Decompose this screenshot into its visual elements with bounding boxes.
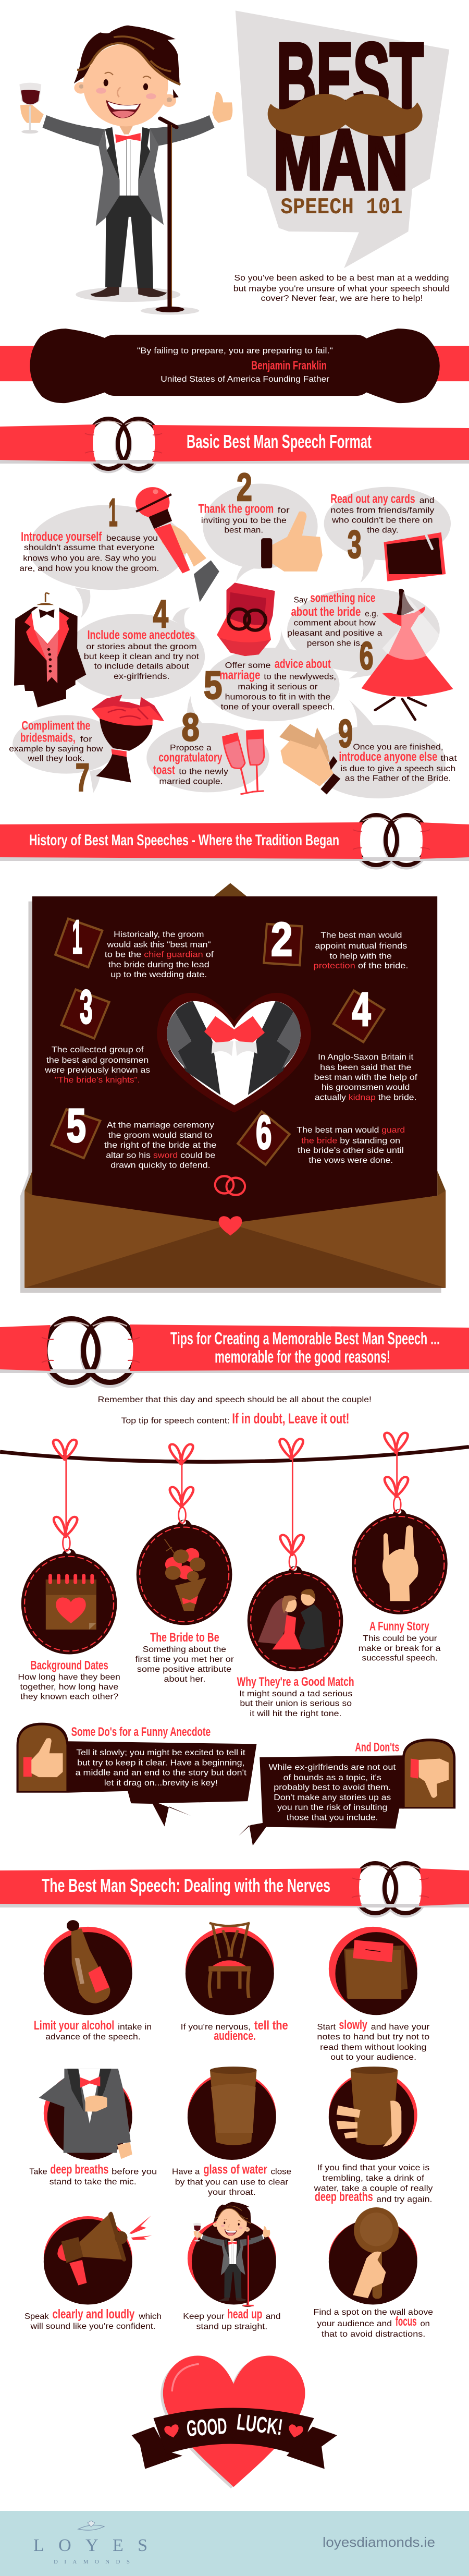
quote: "By failing to prepare, you are preparing to fail.": [137, 346, 333, 355]
icon: banner hearts: [164, 2424, 304, 2439]
label: deep breaths: Take: [29, 2167, 47, 2177]
label: a funny story: successful speech.: [362, 1654, 438, 1662]
label: start slowly: out to your audience.: [330, 2053, 416, 2062]
text: advice about marriage: making it serious or: [238, 683, 318, 691]
numbers 1-6: 3: [80, 981, 93, 1034]
text: don'ts: [268, 1763, 396, 1822]
text: include anecdotes: [84, 627, 199, 681]
icon: thumbs up: [23, 1738, 63, 1777]
text: good luck: LUCK!: [236, 2410, 284, 2440]
panel: nerves row one: [34, 1920, 430, 2062]
author role: United States of America Founding Father: [161, 375, 330, 384]
numbers 1-9: 8: [181, 706, 200, 749]
numbers 1-9: 9: [338, 712, 353, 756]
heading: don'ts: And Don'ts: [355, 1740, 399, 1754]
text 1: the bride during the lead: [108, 961, 209, 969]
label: background dates: they known each other?: [20, 1693, 118, 1701]
text 2: The best man would: [320, 931, 402, 940]
banner: quote bow tie: [0, 329, 469, 403]
icon: two rings: [215, 1176, 245, 1195]
text 6: the bride by standing on: [301, 1137, 400, 1145]
icon: megaphone: [57, 2212, 152, 2286]
text: include anecdotes: or stories about the groom: [86, 642, 197, 651]
panel: history envelope: [20, 883, 446, 1293]
label: trembling voice: and try again.: [376, 2195, 432, 2204]
text: don'ts: While ex-girlfriends are not out: [268, 1763, 396, 1772]
text: read out cards: notes from friends/family: [330, 506, 435, 515]
tip: limit alcohol: [34, 1920, 152, 2042]
icon: moustache: [268, 94, 423, 136]
numbers 1-9: 5: [204, 663, 222, 708]
text: compliment the bridesmaids: Compliment the: [21, 718, 90, 733]
text: something nice about the bride: person she is.: [307, 639, 363, 648]
text 3: "The bride's knights".: [55, 1076, 140, 1085]
numbers 1-9: 4: [153, 592, 168, 636]
label: deep breaths: stand to take the mic.: [50, 2178, 137, 2186]
label: speak clearly: Speak: [24, 2312, 49, 2321]
text: advice about marriage: advice about: [275, 657, 331, 671]
label: speak clearly: [24, 2307, 162, 2331]
envelope back: [24, 883, 446, 1197]
text: propose a toast: toast: [153, 762, 175, 777]
label: the bride to be: Something about the: [143, 1645, 226, 1654]
heading: history ribbon: [0, 815, 469, 868]
text: good luck: GOOD: [186, 2413, 228, 2441]
label: start slowly: slowly: [339, 2017, 367, 2032]
icon: clapping hands: [279, 724, 340, 794]
text: thank the groom: best man.: [225, 526, 263, 534]
text 5: At the marriage ceremony: [107, 1121, 215, 1129]
icon: hand holding microphone: [135, 487, 219, 602]
icon: bouquet: [165, 1539, 206, 1611]
text 5: [104, 1121, 217, 1170]
label: a funny story: [359, 1619, 441, 1662]
heading: basic format ribbon: Basic Best Man Speech Format: [187, 431, 372, 452]
text 2: [314, 931, 409, 970]
heading: nerves ribbon: The Best Man Speech: Dealing with the Nerves: [42, 1875, 330, 1896]
label: head up: head up: [227, 2307, 262, 2322]
numbers 1-6: 2: [271, 914, 292, 966]
text: do's: [76, 1748, 246, 1788]
text: compliment the bridesmaids: bridesmaids,: [20, 730, 76, 745]
text: something nice about the bride: comment about how: [294, 618, 376, 627]
text: introduce yourself: Introduce yourself: [21, 529, 102, 544]
label: speak clearly: clearly and loudly: [52, 2307, 135, 2322]
icon: tuxedo on hanger: [14, 593, 86, 708]
label: glass of water: your throat.: [208, 2188, 256, 2197]
numbers 1-6: 5: [67, 1100, 86, 1152]
label: deep breaths: deep breaths: [50, 2162, 108, 2177]
text 3: the best and groomsmen: [46, 1056, 149, 1065]
heading: basic format ribbon: [0, 419, 469, 471]
text 2: protection of the bride.: [314, 962, 409, 970]
text: introduce anyone else: is due to give a speech such: [340, 764, 455, 773]
text: something nice about the bride: something nice: [310, 590, 375, 605]
icon: mini groom: [193, 2202, 270, 2307]
text 5: the right of the bride at the: [104, 1141, 217, 1150]
text: include anecdotes: ex-girlfriends.: [114, 672, 169, 681]
label: find a spot: that to avoid distractions.: [322, 2330, 425, 2339]
callout: don'ts: [239, 1739, 455, 1845]
letter: [32, 896, 437, 1225]
text: thank the groom: Thank the groom: [199, 501, 274, 516]
history tiles with numbers: [52, 919, 385, 1165]
icon: notebook: [384, 532, 446, 581]
tip: deep breaths: [29, 2069, 157, 2186]
envelope shadow: [20, 902, 441, 1293]
text 2: to help with the: [330, 952, 392, 961]
illustration: tuxedo heart: [157, 993, 311, 1113]
text: something nice about the bride: e.g.: [365, 610, 378, 618]
speech bubbles: [13, 484, 451, 798]
numbers 1-9: [76, 466, 374, 800]
text: something nice about the bride: pleasant and positive a: [287, 629, 383, 638]
intro text: [233, 274, 450, 303]
label: why they're a good match: It might sound a tad serious: [239, 1690, 352, 1698]
text: compliment the bridesmaids: example by saying how: [9, 745, 103, 754]
label: start slowly: notes to hand but try not to: [317, 2033, 429, 2042]
icon: chair: [208, 1923, 251, 1998]
heading: tips ribbon: [0, 1319, 469, 1386]
label: tell the audience: [181, 2018, 288, 2043]
label: glass of water: close: [270, 2167, 291, 2177]
label: why they're a good match: it will hit the right tone.: [250, 1709, 342, 1718]
text: compliment the bridesmaids: for: [80, 735, 92, 744]
text: introduce anyone else: that: [441, 754, 457, 763]
icon: bottle: [67, 1920, 110, 2003]
label: why they're a good match: Why They're a Good Match: [237, 1674, 354, 1689]
intro text: So you've been asked to be a best man at a wedding: [234, 274, 449, 283]
text: advice about marriage: humorous to fit in with the: [225, 692, 330, 701]
text 1: Historically, the groom: [114, 930, 204, 939]
text: propose a toast: congratulatory: [158, 750, 223, 764]
label: trembling voice: [314, 2164, 433, 2204]
text: propose a toast: [153, 744, 229, 786]
icon: rock hand sign: [382, 1525, 418, 1601]
text: don'ts: probably best to avoid them.: [274, 1783, 391, 1792]
label: trembling voice: trembling, take a drink of: [323, 2174, 425, 2183]
numbers 1-6: [67, 911, 371, 1159]
label: tell the audience: tell the: [254, 2018, 288, 2032]
text 6: The best man would guard: [297, 1126, 405, 1135]
text: good luck: [186, 2410, 284, 2441]
icon: hand holding paddle: [353, 2207, 399, 2299]
heading: do's: Some Do's for a Funny Anecdote: [71, 1724, 211, 1739]
text: introduce anyone else: as the Father of the Bride.: [345, 774, 451, 783]
tip: glass of water: [172, 2067, 291, 2197]
text: propose a toast: to the newly: [179, 768, 229, 776]
text 3: The collected group of: [52, 1046, 144, 1054]
text: introduce yourself: shouldn't assume that everyone: [24, 543, 155, 552]
text: do's: but try to keep it clear. Have a beginning,: [77, 1759, 245, 1767]
label: find a spot: on: [420, 2319, 430, 2328]
text 1: [105, 930, 214, 979]
numbers 1-6: 4: [352, 983, 371, 1036]
tip: tell the audience: [181, 1923, 288, 2043]
text: advice about marriage: [219, 657, 336, 711]
label: trembling voice: If you find that your voice is: [317, 2164, 429, 2172]
label: the bride to be: first time you met her or: [135, 1655, 234, 1664]
numbers 1-9: 3: [348, 523, 362, 566]
text: introduce anyone else: [339, 743, 457, 783]
numbers 1-6: 1: [72, 911, 82, 964]
panel: nerves rows two and three: [24, 2067, 433, 2488]
label: glass of water: Have a: [172, 2167, 200, 2177]
icon: glass: [210, 2067, 256, 2145]
text 6: the vows were done.: [308, 1156, 393, 1165]
label: a funny story: make or break for a: [359, 1644, 441, 1653]
numbers 1-6: 6: [256, 1107, 271, 1159]
text: do's: let it drag on...brevity is key!: [104, 1779, 218, 1788]
text 1: to be the chief guardian of: [105, 951, 214, 959]
text: don'ts: Don't make any stories up as: [274, 1793, 391, 1802]
text 3: [44, 1046, 150, 1085]
text: include anecdotes: but keep it clean and try not: [84, 652, 199, 661]
text: don'ts: of bounds as a topic, it's: [283, 1773, 381, 1782]
text: introduce anyone else: Once you are finished,: [353, 743, 443, 752]
icon: champagne flutes: [223, 730, 264, 794]
text: advice about marriage: Offer some: [225, 661, 270, 670]
label: limit alcohol: [34, 2018, 152, 2042]
text: read out cards: the day.: [367, 526, 399, 534]
text 4: best man with the help of: [314, 1073, 418, 1082]
label: find a spot: [314, 2308, 433, 2339]
website: loyesdiamonds.ie: [323, 2534, 435, 2550]
text 6: the bride's other side until: [298, 1146, 404, 1155]
label: glass of water: glass of water: [203, 2162, 267, 2177]
tip: find a spot: [314, 2207, 433, 2339]
text: advice about marriage: tone of your overall speech.: [221, 703, 335, 711]
text: read out cards: who couldn't be there on: [331, 516, 433, 525]
intro text: cover? Never fear, we are here to help!: [261, 294, 423, 303]
text: introduce yourself: because you: [106, 534, 158, 543]
text: something nice about the bride: [287, 590, 383, 648]
text: do's: Tell it slowly; you might be excited to tell it: [76, 1748, 245, 1757]
numbers 1-9: 1: [108, 491, 118, 535]
quote author: Benjamin Franklin: [251, 359, 327, 372]
label: limit alcohol: intake in: [118, 2023, 152, 2032]
icon: hand holding glass: [337, 2067, 401, 2147]
envelope front: [24, 1190, 446, 1288]
icon: wedding dress: [361, 589, 453, 720]
heading: nerves ribbon: [0, 1863, 469, 1916]
label: start slowly: read them without looking: [320, 2043, 427, 2052]
label: head up: Keep your: [183, 2312, 225, 2321]
text: something nice about the bride: Say: [294, 596, 308, 604]
label: limit alcohol: advance of the speech.: [45, 2033, 141, 2042]
label: glass of water: by that you can use to clear: [175, 2178, 288, 2187]
text: introduce yourself: are, and how you know the groom.: [19, 564, 159, 573]
text: thank the groom: inviting you to be the: [201, 516, 287, 525]
text: top tip: [121, 1411, 349, 1427]
good luck heart: [132, 2356, 337, 2488]
logo: loyes diamonds: DIAMONDS: [54, 2559, 130, 2565]
panel: hero: [0, 10, 469, 403]
label: find a spot: Find a spot on the wall above: [314, 2308, 433, 2317]
panel: tips: [0, 1395, 469, 1718]
logo: loyes diamonds: LOYES: [33, 2536, 147, 2555]
label: background dates: [18, 1658, 120, 1701]
panel: basic speech format: [9, 466, 457, 800]
icon: bouquet: [92, 695, 164, 783]
numbers 1-9: 6: [360, 634, 374, 678]
text: don'ts: those that you include.: [287, 1813, 378, 1822]
label: find a spot: focus: [396, 2315, 417, 2329]
label: why they're a good match: [237, 1674, 354, 1718]
panel: do's and don'ts: [17, 1723, 455, 1845]
text 1: up to the wedding date.: [110, 970, 207, 979]
text: do's: a middle and an end to the story but don't: [76, 1768, 246, 1777]
label: a funny story: This could be your: [363, 1634, 437, 1643]
label: the bride to be: about her.: [164, 1675, 205, 1684]
icon: calendar: [46, 1574, 96, 1630]
text: compliment the bridesmaids: well they look.: [27, 755, 84, 763]
illustration: groom with microphone: [19, 26, 232, 315]
icon: mini stand: [243, 2235, 254, 2305]
label: why they're a good match: but their union is serious so: [240, 1699, 352, 1708]
icon: envelope heart: [219, 1216, 242, 1236]
text 1: would ask this "best man": [106, 941, 211, 950]
text: top tip: If in doubt, Leave it out!: [232, 1411, 349, 1427]
text 5: drawn quickly to defend.: [110, 1161, 211, 1170]
text 2: appoint mutual friends: [315, 942, 407, 951]
text: thank the groom: [199, 501, 290, 534]
icon: jacket with hand on chest: [39, 2069, 132, 2159]
icon: thumbs up: [261, 512, 323, 572]
label: deep breaths: [29, 2162, 157, 2186]
text 4: has been said that the: [320, 1063, 411, 1072]
text: include anecdotes: to include details about: [94, 662, 189, 671]
label: the bride to be: some positive attribute: [137, 1665, 231, 1674]
text 5: altar so his sword could be: [106, 1151, 215, 1160]
ornament: good match: [237, 1439, 354, 1718]
label: background dates: together, how long have: [20, 1683, 118, 1692]
logo: loyes diamonds: [33, 2521, 147, 2565]
label: start slowly: [317, 2017, 430, 2062]
label: speak clearly: will sound like you're confident.: [30, 2322, 155, 2331]
label: background dates: How long have they been: [18, 1673, 120, 1682]
tip: start slowly: [317, 1927, 430, 2062]
text: propose a toast: Propose a: [170, 744, 212, 752]
ornament: background dates: [18, 1440, 120, 1701]
label: head up: and: [266, 2312, 280, 2321]
text: read out cards: [330, 491, 435, 534]
text: advice about marriage: to the newlyweds,: [264, 672, 336, 681]
banner: [132, 2408, 337, 2469]
intro text: but maybe you're unsure of what your speech should: [233, 285, 450, 293]
icon: thumbs down: [411, 1758, 449, 1798]
text: reminder: Remember that this day and speech should be all about the couple!: [98, 1395, 372, 1404]
label: the bride to be: [135, 1630, 234, 1684]
label: trembling voice: deep breaths: [315, 2190, 373, 2204]
label: tell the audience: audience.: [214, 2028, 256, 2043]
text: include anecdotes: Include some anecdotes: [88, 627, 195, 642]
tip: speak clearly: [24, 2212, 162, 2331]
text 4: In Anglo-Saxon Britain it: [318, 1053, 413, 1062]
text: top tip: Top tip for speech content:: [121, 1416, 230, 1425]
text: read out cards: and: [419, 496, 434, 505]
text: read out cards: Read out any cards: [330, 491, 415, 506]
ornament: funny story: [352, 1433, 448, 1662]
label: deep breaths: before you: [112, 2167, 157, 2177]
string: [0, 1447, 469, 1462]
label: trembling voice: water, take a couple of really: [314, 2184, 433, 2193]
text: compliment the bridesmaids: [9, 718, 103, 763]
text: introduce yourself: knows who you are. Say who you: [23, 554, 156, 563]
label: speak clearly: which: [138, 2312, 162, 2321]
numbers 1-9: 7: [76, 756, 90, 800]
heading: history ribbon: History of Best Man Speeches - Where the Tradition Began: [29, 832, 339, 849]
text: something nice about the bride: about the bride: [291, 604, 361, 619]
label: head up: stand up straight.: [196, 2322, 267, 2331]
text 4: actually kidnap the bride.: [315, 1093, 417, 1102]
tip: head up: [183, 2202, 280, 2331]
text 3: were previously known as: [44, 1066, 150, 1075]
label: find a spot: your audience and: [317, 2319, 392, 2328]
label: tell the audience: If you're nervous,: [181, 2023, 251, 2032]
label: head up: [183, 2307, 280, 2331]
numbers 1-9: 2: [237, 466, 252, 509]
footer: [0, 2511, 469, 2576]
text: introduce yourself: [19, 529, 159, 573]
text: advice about marriage: marriage: [219, 667, 260, 682]
icon: ring box: [217, 582, 275, 656]
label: limit alcohol: Limit your alcohol: [34, 2018, 114, 2032]
label: a funny story: A Funny Story: [369, 1619, 429, 1633]
callout: do's: [17, 1723, 256, 1827]
icon: notes: [344, 1940, 408, 1999]
label: background dates: Background Dates: [31, 1658, 108, 1672]
label: glass of water: [172, 2162, 291, 2197]
text: propose a toast: married couple.: [159, 777, 223, 786]
text 5: the groom would stand to: [108, 1131, 213, 1140]
label: the bride to be: The Bride to Be: [150, 1630, 219, 1645]
label: start slowly: and have your: [371, 2023, 430, 2032]
label: start slowly: Start: [317, 2023, 336, 2032]
tip: trembling voice: [314, 2067, 433, 2204]
text: don'ts: you run the risk of insulting: [277, 1803, 387, 1812]
text 4: his groomsmen would: [322, 1084, 410, 1092]
text 4: [314, 1053, 418, 1102]
subtitle: speech 101: SPEECH 101: [280, 195, 403, 221]
icon: bride and groom: [258, 1589, 325, 1649]
text 6: [297, 1126, 405, 1165]
ornament: the bride to be: [135, 1444, 234, 1684]
speech bubble: [236, 10, 449, 268]
text: thank the groom: for: [278, 506, 290, 515]
